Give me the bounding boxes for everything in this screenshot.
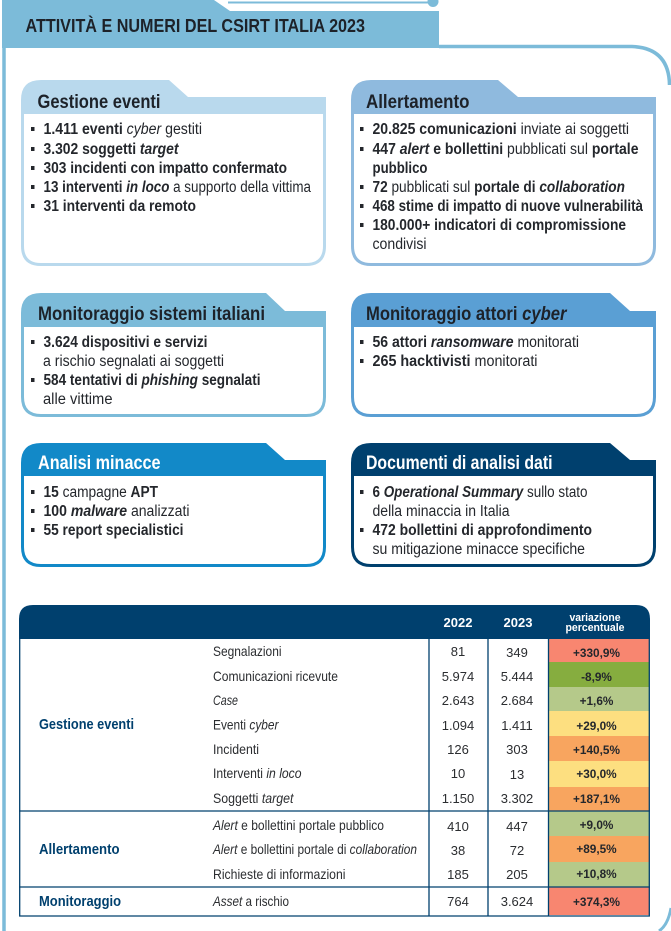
percent change values: +10,8% (576, 867, 617, 881)
list: Documenti di analisi dati: 472 bollettini di approfondimento (372, 522, 592, 539)
row labels: Asset a rischio (212, 893, 289, 909)
percent change values: +1,6% (580, 694, 614, 708)
list: Allertamento: 20.825 comunicazioni inviate ai soggetti (372, 121, 629, 138)
percent change values (573, 646, 620, 909)
row group labels: Allertamento (39, 841, 120, 858)
values 2023: 13 (510, 767, 524, 782)
values 2023: 349 (506, 645, 528, 660)
values 2023: 3.624 (501, 894, 533, 909)
values 2022: 10 (451, 766, 465, 781)
panel: Documenti di analisi dati (351, 443, 656, 567)
row labels: Segnalazioni (213, 643, 282, 659)
list: Monitoraggio sistemi italiani: 3.624 dispositivi e servizi (44, 334, 208, 351)
values 2023: 1.411 (501, 718, 533, 733)
heading: Monitoraggio attori cyber: Monitoraggio attori cyber (366, 304, 568, 325)
panel: Allertamento (351, 80, 656, 266)
percent change values: +89,5% (576, 842, 617, 856)
percent change values: +30,0% (576, 767, 617, 781)
list: Documenti di analisi dati: 6 Operational Summary sullo stato (372, 484, 588, 501)
panel: Analisi minacce (21, 443, 326, 567)
list: Documenti di analisi dati: della minaccia in Italia (372, 503, 510, 520)
list: Analisi minacce (31, 484, 190, 539)
values 2022 (442, 644, 474, 909)
table header: variazione (570, 612, 620, 624)
list: Allertamento: pubblico (372, 160, 428, 177)
list: Gestione eventi (31, 121, 311, 215)
row labels: Comunicazioni ricevute (213, 668, 338, 684)
title banner (2, 0, 439, 48)
list: Monitoraggio attori cyber: 56 attori ransomware monitorati (372, 334, 579, 351)
heading: Monitoraggio sistemi italiani: Monitoraggio sistemi italiani (38, 304, 265, 325)
percent change values: +9,0% (580, 818, 614, 832)
values 2022: 38 (451, 843, 465, 858)
row group labels: Monitoraggio (39, 893, 121, 910)
values 2022: 185 (447, 867, 469, 882)
list: Monitoraggio attori cyber (360, 334, 579, 370)
row labels: Alert e bollettini portale pubblico (212, 817, 384, 833)
list: Gestione eventi: 31 interventi da remoto (44, 198, 196, 215)
panel: Monitoraggio sistemi italiani (21, 293, 326, 417)
list: Gestione eventi: 3.302 soggetti target (44, 141, 179, 158)
list: Monitoraggio sistemi italiani: 584 tentativi di phishing segnalati (44, 372, 260, 389)
percent change values: +187,1% (573, 792, 620, 806)
values 2022: 2.643 (442, 693, 474, 708)
values 2022: 1.150 (442, 791, 474, 806)
values 2022: 5.974 (442, 669, 474, 684)
row labels: Richieste di informazioni (213, 866, 346, 882)
row labels: Case (213, 692, 238, 708)
list: Monitoraggio sistemi italiani: a rischio segnalati ai soggetti (43, 353, 224, 370)
row group labels: Gestione eventi (39, 716, 134, 733)
table header: 2023 (504, 615, 532, 630)
table header: percentuale (566, 622, 624, 634)
list: Gestione eventi: 13 interventi in loco a supporto della vittima (44, 179, 311, 196)
list: Allertamento: 72 pubblicati sul portale di collaboration (372, 179, 625, 196)
list: Analisi minacce: 100 malware analizzati (44, 503, 190, 520)
list: Monitoraggio attori cyber: 265 hacktivisti monitorati (372, 353, 538, 370)
values 2023: 5.444 (501, 669, 533, 684)
list: Monitoraggio sistemi italiani (31, 334, 260, 408)
list: Gestione eventi: 1.411 eventi cyber gestiti (44, 121, 202, 138)
values 2022: 126 (447, 742, 469, 757)
heading: Gestione eventi: Gestione eventi (38, 92, 160, 113)
row labels: Eventi cyber (213, 716, 280, 732)
values 2023: 447 (506, 819, 528, 834)
list: Monitoraggio sistemi italiani: alle vittime (43, 391, 112, 408)
row labels: Soggetti target (213, 790, 294, 806)
heading: Documenti di analisi dati: Documenti di analisi dati (366, 453, 552, 474)
values 2022: 81 (451, 644, 465, 659)
percent change values: -8,9% (581, 670, 612, 684)
values 2023: 3.302 (501, 791, 533, 806)
values 2022: 764 (447, 894, 469, 909)
row group labels (39, 716, 134, 910)
row labels: Interventi in loco (213, 765, 302, 781)
table: confronto 2022-2023 (19, 605, 650, 916)
heading: Analisi minacce: Analisi minacce (38, 453, 160, 474)
values 2022: 1.094 (442, 718, 474, 733)
row labels: Incidenti (213, 741, 259, 757)
row labels: Alert e bollettini portale di collaboration (212, 841, 417, 857)
title banner: ATTIVITÀ E NUMERI DEL CSIRT ITALIA 2023 (26, 15, 365, 36)
percent change values: +140,5% (573, 743, 620, 757)
table header: 2022 (444, 615, 472, 630)
list: Allertamento: 447 alert e bollettini pubblicati sul portale (372, 141, 639, 158)
values 2023: 303 (506, 742, 528, 757)
panel: Monitoraggio attori cyber (351, 293, 656, 417)
list: Documenti di analisi dati: su mitigazione minacce specifiche (372, 541, 585, 558)
heading: Allertamento: Allertamento (366, 92, 470, 113)
table grid (19, 639, 650, 916)
list: Documenti di analisi dati (360, 484, 592, 558)
values 2023: 72 (510, 843, 524, 858)
percent change values: +330,9% (573, 646, 620, 660)
percent change values: +29,0% (576, 719, 617, 733)
values 2023: 205 (506, 867, 528, 882)
list: Analisi minacce: 55 report specialistici (44, 522, 184, 539)
values 2023 (501, 645, 533, 909)
list: Analisi minacce: 15 campagne APT (44, 484, 158, 501)
list: Allertamento: 180.000+ indicatori di compromissione (372, 217, 626, 234)
values 2023: 2.684 (501, 693, 533, 708)
row labels (212, 643, 417, 909)
list: Gestione eventi: 303 incidenti con impatto confermato (44, 160, 287, 177)
panel: Gestione eventi (21, 80, 326, 266)
list: Allertamento: condivisi (372, 236, 426, 253)
percent change cells (549, 639, 649, 915)
list: Allertamento (360, 121, 643, 253)
percent change values: +374,3% (573, 895, 620, 909)
values 2022: 410 (447, 819, 469, 834)
table header (19, 605, 650, 639)
